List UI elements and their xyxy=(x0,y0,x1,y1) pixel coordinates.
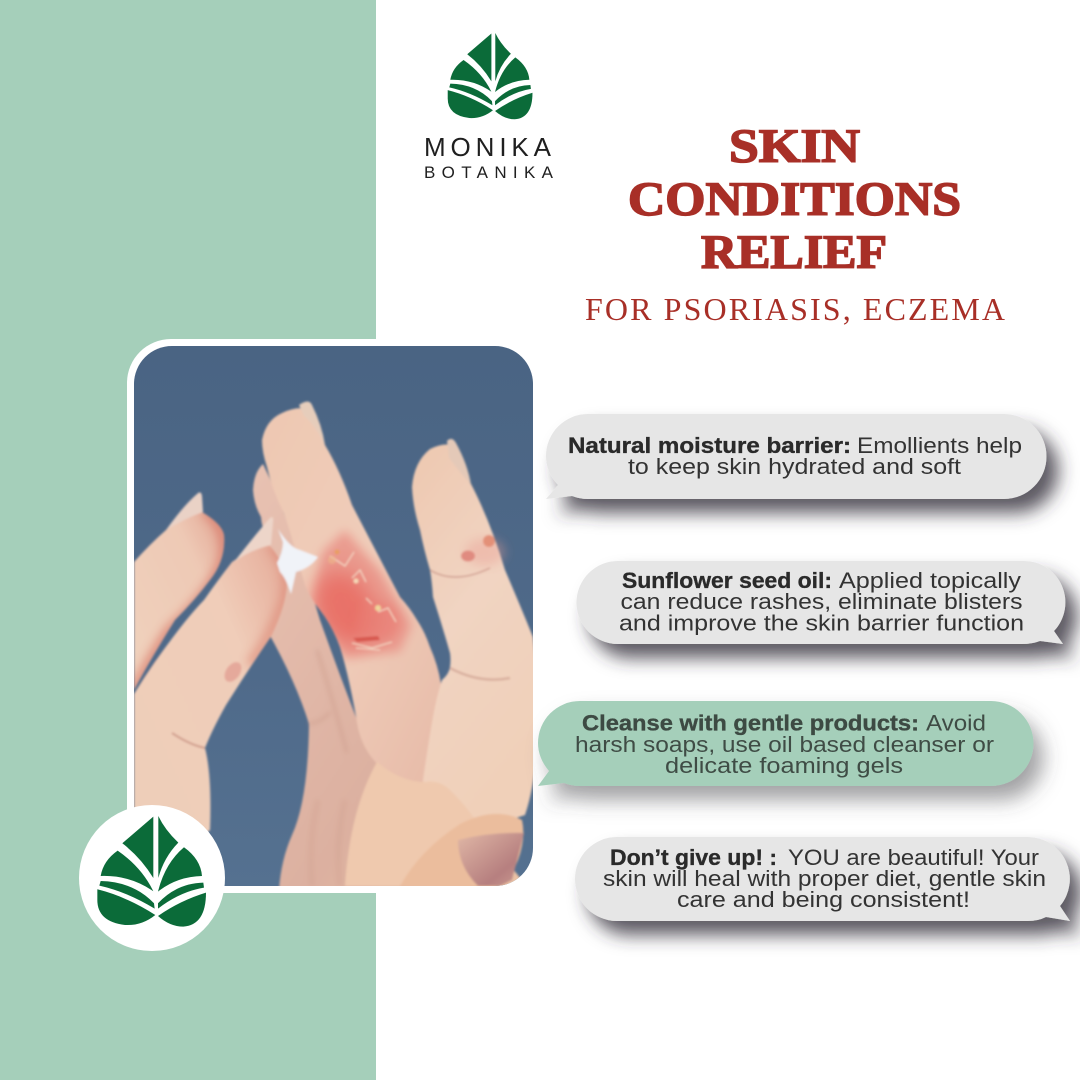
red finger behind xyxy=(134,612,232,760)
left nail xyxy=(166,492,203,530)
callout: natural moisture barrier: Emollients help xyxy=(857,433,1022,458)
callout: natural moisture barrier: Natural moisture barrier: xyxy=(568,433,851,458)
title: SKIN xyxy=(729,120,860,173)
callout: cleanse with gentle products: harsh soaps, use oil based cleanser or xyxy=(575,732,995,757)
icon: green leaf xyxy=(97,816,206,927)
logo: Monika Botanika xyxy=(424,33,554,182)
subtitle: FOR PSORIASIS, ECZEMA xyxy=(585,291,1005,327)
white photo frame xyxy=(127,339,540,893)
rash xyxy=(304,530,412,658)
callout: don't give up: skin will heal with proper diet, gentle skin xyxy=(603,866,1046,891)
icon: green leaf xyxy=(448,33,532,119)
rash nail xyxy=(299,402,325,445)
callout: sunflower seed oil: can reduce rashes, eliminate blisters xyxy=(620,589,1022,614)
finger with rash xyxy=(262,408,447,782)
pinching finger xyxy=(134,544,288,832)
callout: don't give up: care and being consistent! xyxy=(677,887,970,912)
lower palm fold xyxy=(345,762,480,886)
callout: cleanse with gentle products: Avoid xyxy=(926,710,986,736)
title xyxy=(628,120,961,279)
callout: don't give up: Don’t give up! : xyxy=(610,845,777,870)
callout: cleanse with gentle products: delicate foaming gels xyxy=(665,753,903,778)
green side panel xyxy=(0,0,376,1080)
callout: cleanse with gentle products xyxy=(538,701,1034,786)
right finger xyxy=(412,444,538,830)
thumb xyxy=(400,814,523,890)
callout: natural moisture barrier xyxy=(546,414,1046,499)
callout: natural moisture barrier: to keep skin hydrated and soft xyxy=(628,454,962,479)
left finger xyxy=(134,510,225,692)
title: RELIEF xyxy=(701,226,887,279)
callout: cleanse with gentle products: Cleanse with gentle products: xyxy=(582,710,919,736)
round logo badge xyxy=(79,805,225,951)
photo: fingers with eczema and cream xyxy=(134,346,538,890)
palm and rear fingers xyxy=(253,464,530,890)
callout: sunflower seed oil: and improve the skin barrier function xyxy=(619,610,1024,636)
rear finger divider xyxy=(318,656,320,658)
callout: don't give up: YOU are beautiful! Your xyxy=(788,845,1040,870)
cream xyxy=(277,529,318,594)
title: CONDITIONS xyxy=(628,173,961,226)
brand name: MONIKA xyxy=(424,132,552,162)
callout: sunflower seed oil: Sunflower seed oil: xyxy=(622,568,832,593)
pinching nail xyxy=(234,517,273,562)
spots on right finger xyxy=(465,538,505,566)
brand subline: BOTANIKA xyxy=(424,163,554,182)
callout: sunflower seed oil xyxy=(576,561,1065,644)
callout: don't give up xyxy=(575,837,1070,921)
thumb nail xyxy=(458,833,524,886)
callout: sunflower seed oil: Applied topically xyxy=(839,568,1022,593)
